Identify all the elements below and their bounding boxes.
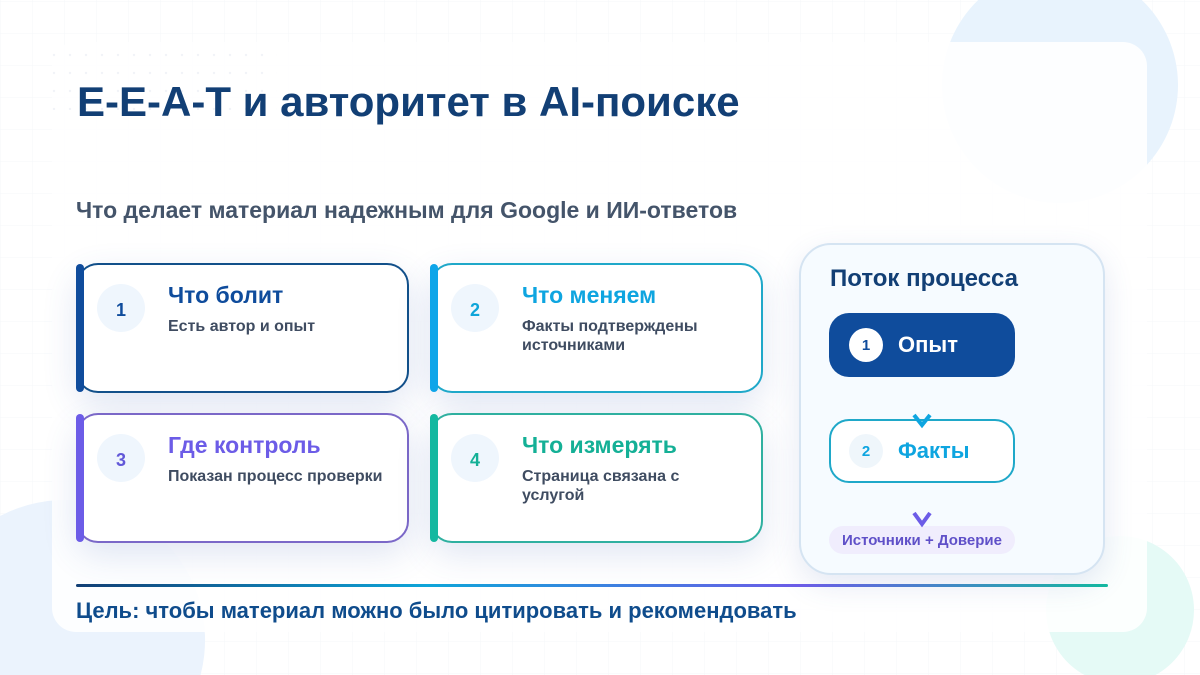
arrow: step 1 to step 2	[912, 414, 932, 428]
dot pattern	[53, 54, 263, 110]
number 1: 1	[116, 300, 126, 320]
goal statement: Цель: чтобы материал можно было цитировать и рекомендовать	[76, 598, 797, 623]
card 4 heading: Что измерять	[522, 432, 677, 458]
card 4 text	[522, 468, 679, 504]
card 3	[66, 413, 420, 566]
main panel	[52, 42, 1147, 632]
step 1 label: Опыт	[898, 332, 958, 357]
subtitle: Что делает материал надежным для Google и ИИ-ответов	[76, 197, 737, 223]
step 1	[829, 313, 1015, 377]
divider	[76, 584, 1108, 587]
flow heading: Поток процесса	[830, 265, 1018, 292]
card 4 text: Страница связана с	[522, 468, 679, 485]
number 2	[451, 284, 499, 332]
step 2 label: Факты	[898, 438, 970, 463]
card 3 text: Показан процесс проверки	[168, 468, 382, 485]
step 3 pill	[829, 526, 1015, 554]
step 2	[829, 419, 1015, 483]
title: E-E-A-T и авторитет в AI-поиске	[77, 78, 740, 125]
card 2 text: источниками	[522, 337, 625, 354]
card 2 text: Факты подтверждены	[522, 318, 698, 335]
number 3	[97, 434, 145, 482]
number 3: 3	[116, 450, 126, 470]
arrow: step 2 to step 3	[912, 512, 932, 528]
number 2: 2	[470, 300, 480, 320]
card 4 text: услугой	[522, 487, 584, 504]
step 1 badge	[849, 328, 883, 362]
card 1	[66, 263, 420, 413]
number 4: 4	[470, 450, 480, 470]
card 2 heading: Что меняем	[522, 282, 656, 308]
card 2 text	[522, 318, 698, 354]
card 1 text: Есть автор и опыт	[168, 318, 315, 335]
card 2	[420, 263, 774, 413]
number 4	[451, 434, 499, 482]
step 2 badge: 2	[862, 443, 870, 460]
card 3 heading: Где контроль	[168, 432, 321, 458]
number 1	[97, 284, 145, 332]
step 2 badge	[849, 434, 883, 468]
card 1 heading: Что болит	[168, 282, 283, 308]
panel: process flow	[799, 243, 1105, 575]
step 3 pill: Источники + Доверие	[842, 532, 1002, 549]
step 1 badge: 1	[862, 337, 870, 354]
card 4	[420, 413, 774, 566]
